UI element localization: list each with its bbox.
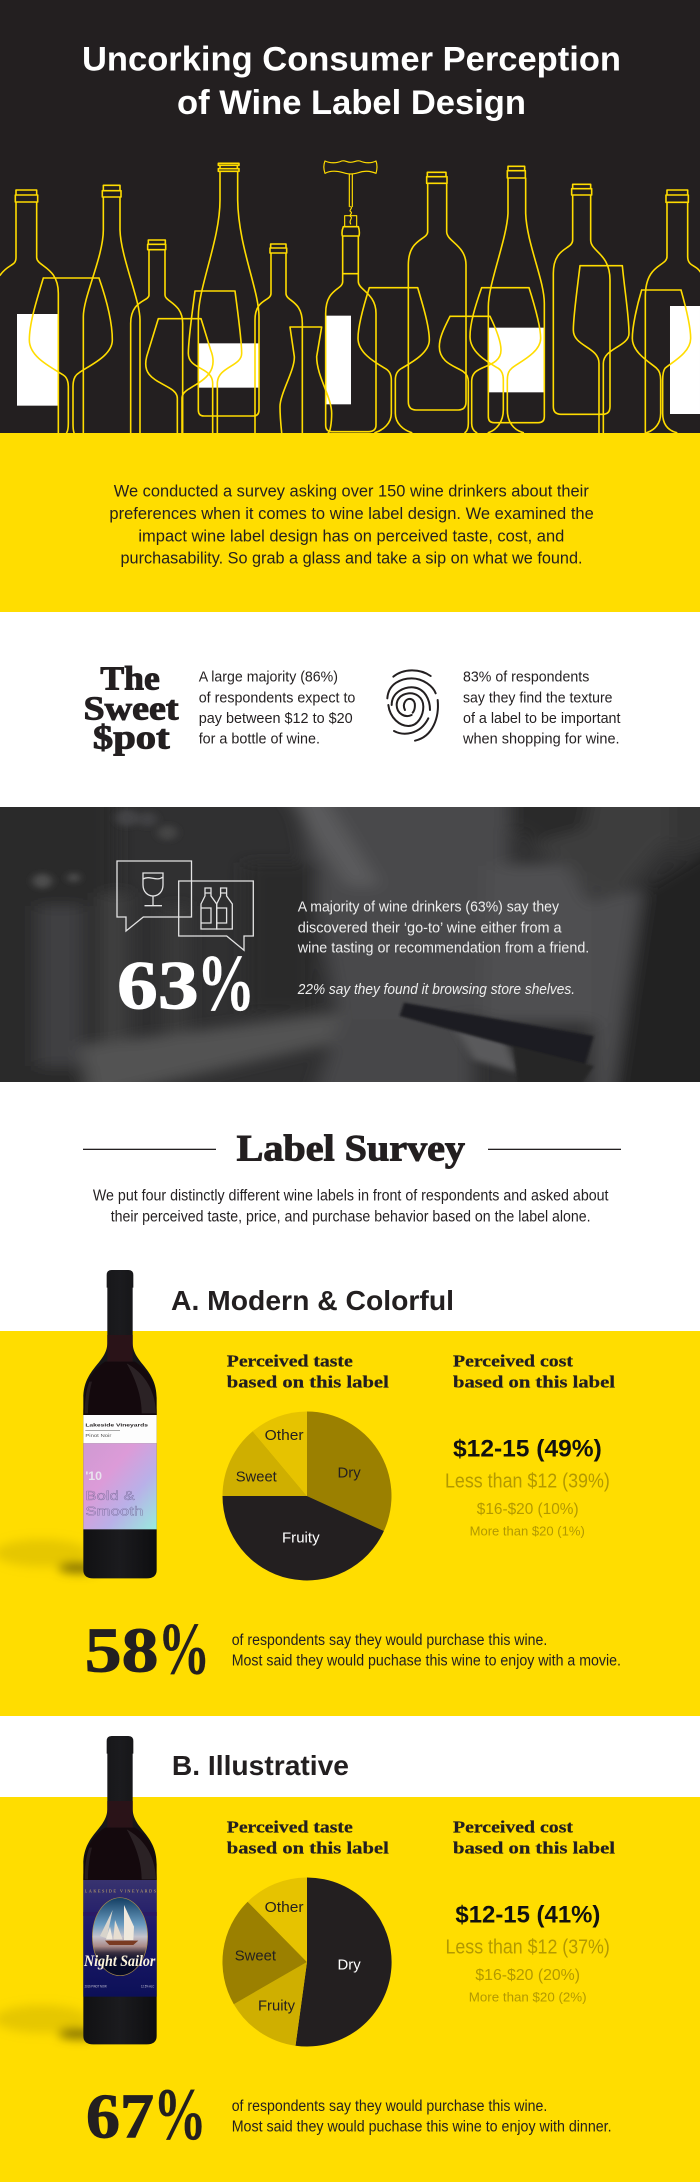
heading: perceived taste: Perceived taste [227,1352,353,1371]
pie chart: taste A [222,1412,391,1580]
heading: the sweet spot: The [100,660,160,697]
bottle shadow [0,1539,98,1573]
heading: perceived taste: Perceived taste [227,1818,353,1837]
bottle: illustrative label: LAKESIDE VINEYARDS [85,1888,157,1893]
title: Uncorking Consumer Perception [82,40,621,78]
heading: perceived taste [227,1352,389,1391]
cost ranking A [445,1436,610,1539]
bottle: modern and colorful label: Smooth [85,1504,143,1519]
bottle: illustrative label: 2016 PINOT NOIR [85,1984,107,1988]
heading: the sweet spot: Sweet [84,690,179,727]
title [82,40,621,122]
heading: the sweet spot [84,660,179,756]
intro text: purchasability. So grab a glass and take a sip on what we found. [120,550,582,568]
illustration: wine bottles and glasses [0,161,700,433]
cost ranking B: Less than $12 (37%) [446,1936,610,1958]
text: discovery [297,899,589,998]
stat: 58%: % [158,1608,210,1690]
bottle shadow [0,2005,98,2039]
bottle: modern and colorful label: Pinot Noir [85,1433,112,1439]
text: purchase intent B: Most said they would puchase this wine to enjoy with dinner. [232,2119,612,2136]
heading: perceived cost [453,1818,616,1857]
heading: perceived cost: Perceived cost [453,1352,574,1371]
cost ranking B: $16-$20 (20%) [475,1967,580,1984]
text: label texture: 83% of respondents [463,669,589,686]
heading: perceived taste: based on this label [227,1372,389,1391]
heading: section A: A. Modern & Colorful [171,1285,454,1316]
bottle: modern and colorful label: Lakeside Vineyards [85,1422,148,1428]
pie chart: taste A: Dry [338,1465,361,1482]
panel: section B [0,1736,700,2182]
text: discovery: discovered their ‘go-to’ wine either from a [298,919,562,936]
heading: perceived cost: Perceived cost [453,1818,574,1837]
cost ranking B: More than $20 (2%) [469,1990,587,2005]
stat: 67%: 67 [86,2080,154,2151]
stat: 67%: % [154,2074,206,2156]
heading: perceived cost [453,1352,616,1391]
pie chart: taste B: Sweet [235,1947,277,1964]
intro text: impact wine label design has on perceived taste, cost, and [138,527,564,545]
bottle: modern and colorful label: '10 [85,1469,102,1483]
text: purchase intent A: of respondents say they would purchase this wine. [232,1632,547,1649]
blurred photo of wine shoppers [40,807,700,1082]
icon: fingerprint [387,670,438,741]
panel: discovery photo [0,807,700,1082]
heading: the sweet spot: $pot [93,719,170,756]
panel: section A [0,1270,700,1716]
stat: 63%: 63 [117,947,199,1023]
stat: 58% [85,1608,210,1690]
text: purchase intent B [232,2098,612,2136]
intro text: We conducted a survey asking over 150 wine drinkers about their [114,483,589,501]
bottle: modern and colorful label: Bold & [85,1488,135,1503]
text: price expectation: of respondents expect to [199,689,355,706]
pie chart: taste A: Sweet [236,1469,278,1486]
photo foreground details [33,809,518,1073]
text: label texture: when shopping for wine. [462,730,620,747]
text: price expectation: pay between $12 to $20 [199,710,353,727]
illustration right half [358,166,700,433]
stat: 63%: % [197,940,255,1028]
pie chart: taste B [222,1877,392,2046]
photo: bottle in hand [400,1003,594,1086]
text: price expectation: A large majority (86%) [199,669,338,686]
heading: label survey: Label Survey [237,1129,466,1170]
stat: 67% [86,2074,206,2156]
text: survey description: their perceived taste, price, and purchase behavior based on the label alone. [111,1208,591,1225]
text: survey description [93,1188,609,1225]
text: price expectation: for a bottle of wine. [199,730,320,747]
cost ranking A: More than $20 (1%) [470,1524,585,1539]
text: label texture: of a label to be important [463,710,621,727]
illustration left half [0,161,377,433]
text: label texture [462,669,621,747]
bottle: illustrative label: Night Sailor [83,1953,156,1970]
text: survey description: We put four distinctly different wine labels in front of respondents and asked about [93,1188,609,1205]
text: discovery: 22% say they found it browsing store shelves. [297,981,575,998]
bottle: illustrative label: 12.5% ALC [141,1984,155,1988]
pie chart: taste B: Dry [338,1956,361,1973]
cost ranking A: $16-$20 (10%) [477,1501,579,1518]
bottle: modern and colorful label [83,1270,157,1578]
pie chart: taste B: Other [265,1899,304,1916]
pie chart: taste A: Other [265,1427,304,1444]
heading: perceived cost: based on this label [453,1838,616,1857]
title: of Wine Label Design [177,84,526,122]
text: label texture: say they find the texture [463,689,612,706]
stat: 63% [117,940,255,1028]
pie chart: taste A: Fruity [282,1529,320,1546]
panel: intro [0,433,700,612]
pie chart: taste B: Fruity [258,1998,295,2015]
intro text [109,483,594,568]
cost ranking B: $12-15 (41%) [455,1902,600,1929]
icon: speech bubbles with glass and bottles [117,861,253,950]
heading: perceived cost: based on this label [453,1372,616,1391]
intro text: preferences when it comes to wine label design. We examined the [109,505,594,523]
text: discovery: wine tasting or recommendation from a friend. [297,940,589,957]
cost ranking A: $12-15 (49%) [453,1436,602,1463]
header band [0,0,700,433]
text: price expectation [199,669,355,747]
heading: perceived taste [227,1818,389,1857]
cost ranking B [446,1902,610,2005]
heading: section B: B. Illustrative [172,1750,349,1781]
heading: perceived taste: based on this label [227,1838,389,1857]
text: discovery: A majority of wine drinkers (63%) say they [298,899,559,916]
text: purchase intent A [232,1632,621,1670]
bottle: illustrative label [83,1736,157,2044]
stat: 58%: 58 [85,1615,158,1686]
cost ranking A: Less than $12 (39%) [445,1470,610,1492]
text: purchase intent A: Most said they would puchase this wine to enjoy with a movie. [232,1653,621,1670]
text: purchase intent B: of respondents say they would purchase this wine. [232,2098,547,2115]
